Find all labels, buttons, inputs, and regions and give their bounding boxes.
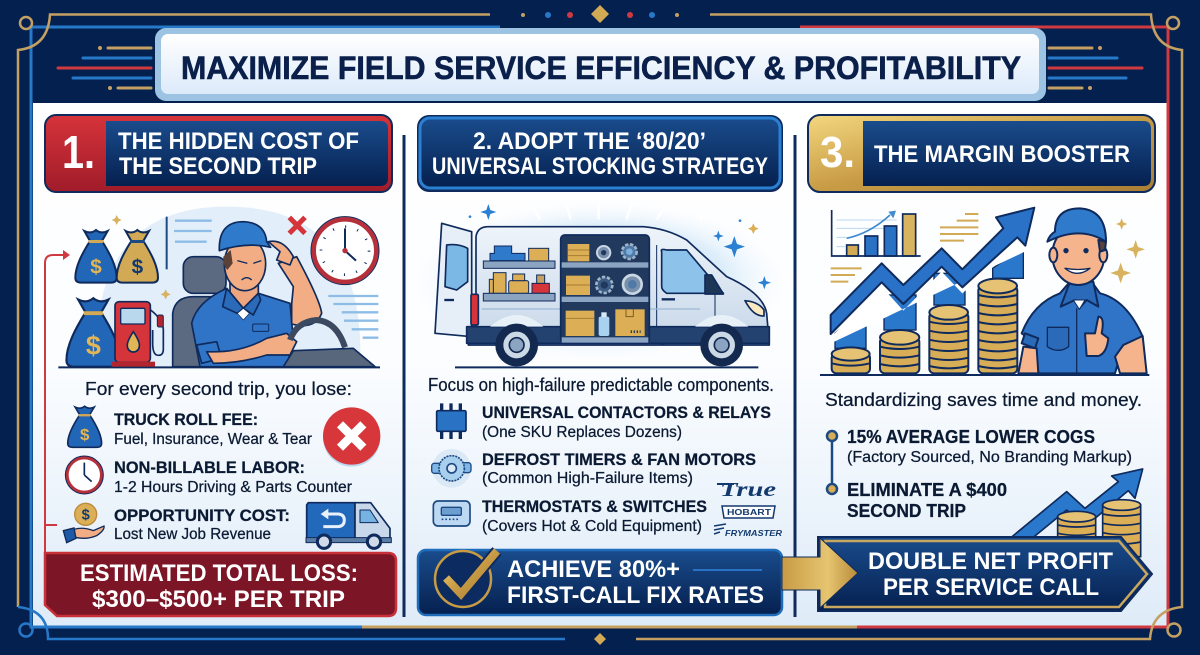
icon: coin in hand: $ xyxy=(82,508,90,524)
list item: thermostats: THERMOSTATS & SWITCHES xyxy=(482,497,707,516)
icon: fuel pump xyxy=(112,302,163,367)
icons: loss list xyxy=(63,406,391,548)
heading: section 2 xyxy=(417,115,783,192)
icon: happy technician xyxy=(1018,208,1147,373)
callout: double net profit: DOUBLE NET PROFIT xyxy=(868,548,1113,575)
callout: first-call fix rates: ACHIEVE 80%+ xyxy=(507,556,680,583)
list item: non-billable labor: 1-2 Hours Driving & Parts Counter xyxy=(114,479,352,496)
blue rising columns xyxy=(835,247,1023,348)
list item: thermostats xyxy=(482,497,707,535)
heading: section 1 xyxy=(45,115,392,192)
illustration: stressed driver with lost money xyxy=(58,207,380,367)
list item: defrost timers: (Common High-Failure Items) xyxy=(482,470,693,487)
brand logos: FRYMASTER xyxy=(725,529,782,538)
arrow: gold connector xyxy=(782,538,858,608)
title: MAXIMIZE FIELD SERVICE EFFICIENCY & PROFITABILITY xyxy=(181,50,1021,86)
list item: contactors: UNIVERSAL CONTACTORS & RELAYS xyxy=(482,403,771,422)
list item: opportunity cost: OPPORTUNITY COST: xyxy=(114,506,290,525)
icon: red cross badge xyxy=(323,407,380,467)
heading: section 3: 3. xyxy=(820,128,855,177)
brand logos xyxy=(714,479,782,538)
wheels xyxy=(499,328,739,362)
mini bar chart xyxy=(832,210,921,256)
icon: red x mark xyxy=(289,217,305,233)
list item: lower cogs: 15% AVERAGE LOWER COGS xyxy=(847,427,1095,447)
panel: the margin booster xyxy=(808,115,1155,611)
list item: defrost timers: DEFROST TIMERS & FAN MOTORS xyxy=(482,450,756,469)
van door xyxy=(435,223,472,337)
left shelves xyxy=(483,246,555,301)
big rising arrow xyxy=(831,208,1034,343)
callout: first-call fix rates xyxy=(418,550,782,615)
list item: thermostats: (Covers Hot & Cold Equipment) xyxy=(482,518,702,535)
icon: fan motor xyxy=(432,449,471,488)
list item: defrost timers xyxy=(482,450,756,487)
icon: money bag blue xyxy=(75,230,117,283)
timeline bullets xyxy=(827,431,837,494)
title xyxy=(155,28,1046,101)
list item: truck roll fee: Fuel, Insurance, Wear & Tear xyxy=(114,431,312,448)
icon: small arrow and coins xyxy=(1010,469,1143,557)
brand logos: HOBART xyxy=(727,508,771,517)
illustration: rising profit with coins and happy technician xyxy=(820,208,1149,375)
icon: money bag: $ xyxy=(80,425,89,444)
icons: components xyxy=(432,403,471,526)
connector arrow xyxy=(45,250,70,553)
list item: opportunity cost: Lost New Job Revenue xyxy=(114,526,271,543)
van body xyxy=(467,227,769,345)
callout: first-call fix rates: FIRST-CALL FIX RATES xyxy=(507,582,764,609)
panel: 80/20 universal stocking strategy xyxy=(405,115,795,615)
icon: clock xyxy=(65,456,103,494)
heading: section 1: THE SECOND TRIP xyxy=(119,153,317,180)
list item: non-billable labor xyxy=(114,458,352,496)
icon: money bag gold xyxy=(117,230,158,283)
icon: wall clock xyxy=(311,217,379,285)
list item: eliminate second trip: SECOND TRIP xyxy=(847,501,966,521)
heading: section 2: UNIVERSAL STOCKING STRATEGY xyxy=(432,153,768,180)
callout: estimated total loss xyxy=(45,553,396,616)
callout: estimated total loss: $300–$500+ PER TRIP xyxy=(92,586,345,613)
icon: stressed technician driver xyxy=(173,222,375,367)
heading: section 3 xyxy=(808,115,1155,192)
heading: section 1: THE HIDDEN COST OF xyxy=(118,128,359,155)
list item: lower cogs xyxy=(847,427,1132,466)
callout: double net profit xyxy=(818,537,1152,611)
heading: section 3: THE MARGIN BOOSTER xyxy=(874,141,1130,168)
cargo rack xyxy=(561,235,649,343)
list item: truck roll fee: TRUCK ROLL FEE: xyxy=(114,410,258,429)
list item: non-billable labor: NON-BILLABLE LABOR: xyxy=(114,458,305,477)
list item: opportunity cost xyxy=(114,506,290,543)
heading: section 2: 2. ADOPT THE ‘80/20’ xyxy=(473,128,706,155)
list item: contactors xyxy=(482,403,771,441)
heading: section 1: 1. xyxy=(62,126,95,178)
callout: estimated total loss: ESTIMATED TOTAL LOSS: xyxy=(80,560,358,587)
icon: returning truck xyxy=(306,503,391,548)
icon: money bag gold: $ xyxy=(132,255,144,278)
lead text: For every second trip, you lose: xyxy=(85,379,352,399)
coin stacks xyxy=(832,279,1017,373)
icon: coin in hand xyxy=(63,503,104,543)
illustration: service van with open shelves xyxy=(405,197,795,367)
brand logos: True xyxy=(720,479,776,501)
icon: money bag xyxy=(68,406,102,447)
lead text: Standardizing saves time and money. xyxy=(825,390,1142,410)
list item: eliminate second trip xyxy=(847,480,1007,521)
list item: truck roll fee xyxy=(114,410,312,448)
lead text: Focus on high-failure predictable components. xyxy=(428,375,774,395)
list item: eliminate second trip: ELIMINATE A $400 xyxy=(847,480,1007,500)
list item: contactors: (One SKU Replaces Dozens) xyxy=(482,424,682,441)
icon: large money bag xyxy=(66,298,120,367)
callout: double net profit: PER SERVICE CALL xyxy=(883,574,1099,601)
icon: relay chip xyxy=(437,403,466,439)
panel: hidden cost of the second trip xyxy=(45,115,396,616)
icon: money bag blue: $ xyxy=(90,255,102,278)
icon: thermostat xyxy=(433,501,470,526)
icon: large money bag: $ xyxy=(86,331,101,361)
list item: lower cogs: (Factory Sourced, No Branding Markup) xyxy=(847,449,1132,466)
